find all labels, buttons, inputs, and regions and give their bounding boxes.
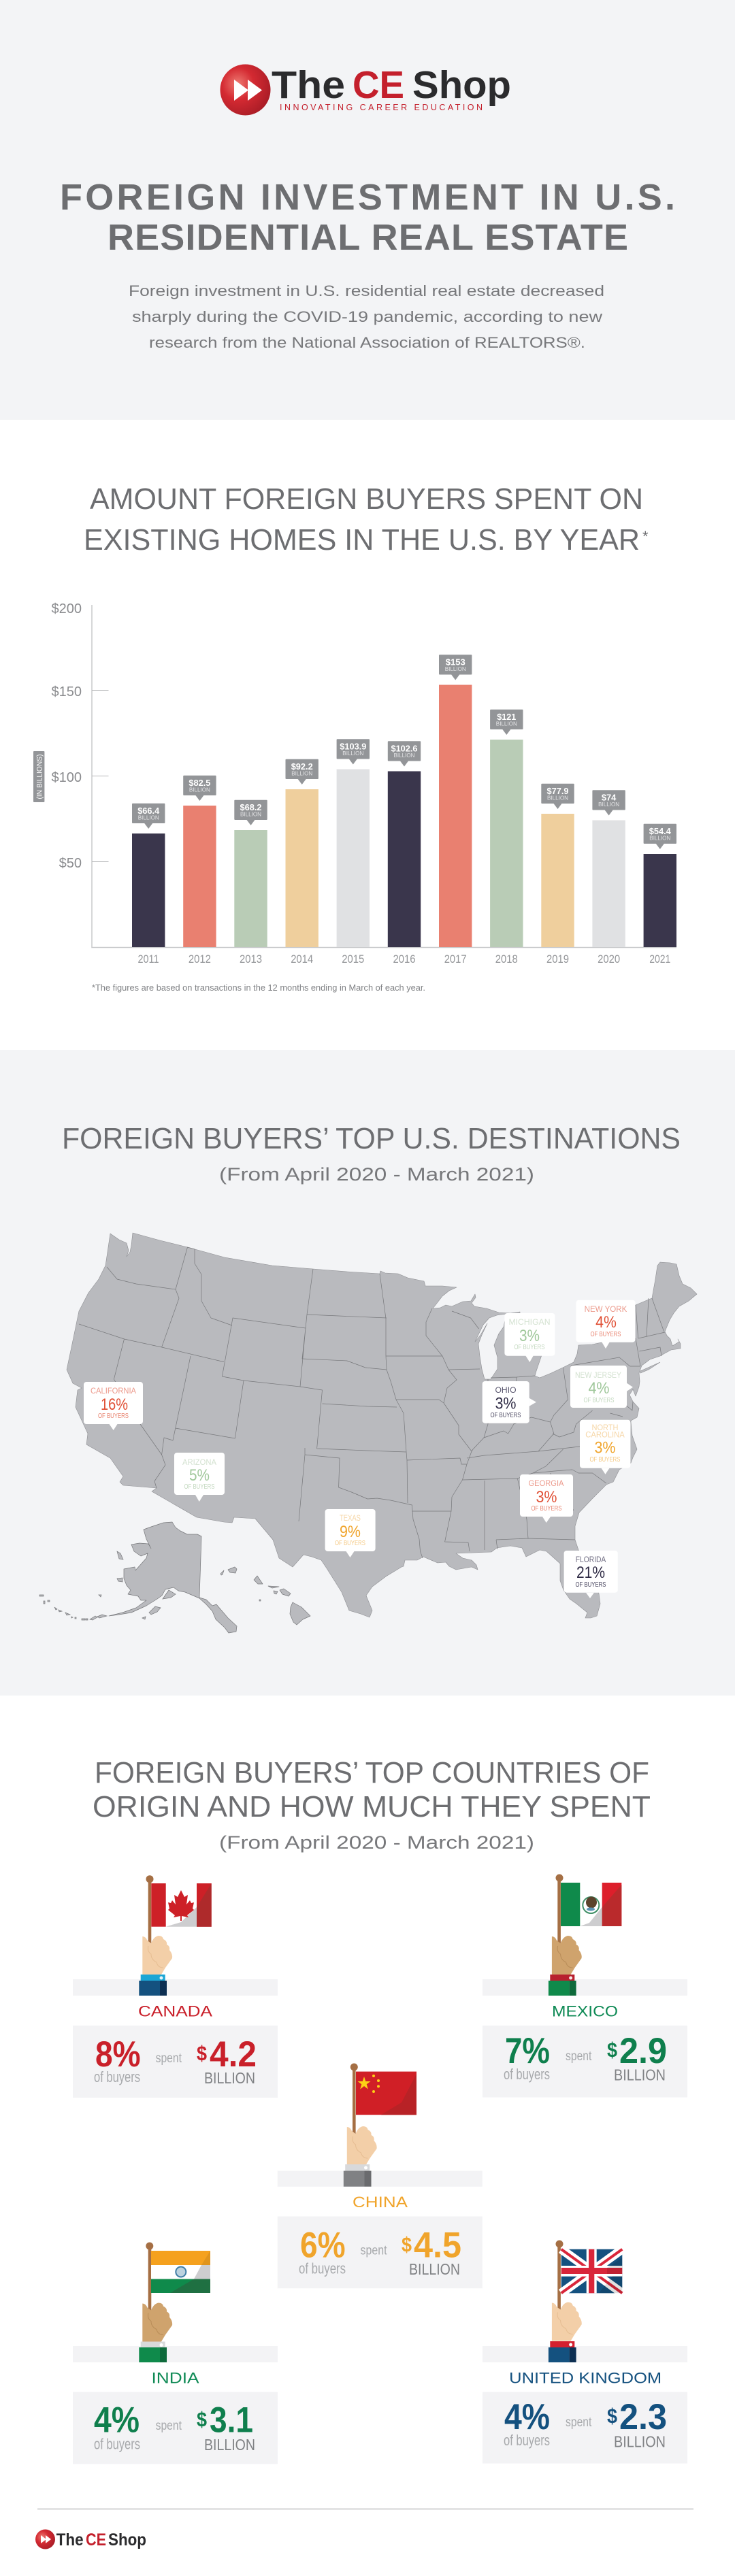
bar 2011: BILLION [138, 814, 159, 821]
intro text: Foreign investment in U.S. residential real estate decreased [129, 282, 604, 299]
bar 2021: 2021 [649, 953, 670, 965]
bar 2020: $74 [602, 793, 617, 803]
stats: United Kingdom: spent [566, 2415, 592, 2430]
callout: Georgia: 3% [536, 1488, 557, 1506]
heading: amount foreign buyers spent: AMOUNT FOREIGN BUYERS SPENT ON [90, 482, 643, 516]
callout: Michigan: OF BUYERS [514, 1343, 544, 1351]
bar 2018: BILLION [496, 720, 517, 727]
callout: New Jersey: 4% [588, 1379, 610, 1398]
bar 2019: 2019 [546, 953, 569, 965]
heading: top countries of origin [93, 1756, 651, 1853]
heading: amount foreign buyers spent: EXISTING HOMES IN THE U.S. BY YEAR [84, 523, 640, 557]
stats: Mexico [483, 2026, 687, 2097]
country: Canada [73, 1875, 278, 2098]
axis label: in billions: (IN BILLIONS) [35, 754, 44, 799]
callout: Ohio: 3% [495, 1395, 516, 1413]
callout: Texas: 9% [340, 1523, 361, 1541]
logo: footer: CE [86, 2530, 106, 2549]
bar 2020 [592, 790, 625, 965]
logo: The CE Shop: Shop [412, 63, 511, 107]
label: Canada: CANADA [138, 2003, 212, 2019]
label: India: INDIA [151, 2369, 199, 2386]
bar 2015: 2015 [342, 953, 364, 965]
bar 2017: BILLION [445, 665, 466, 672]
stats: Mexico: 2.9 [619, 2031, 667, 2071]
logo: The CE Shop: INNOVATING CAREER EDUCATION [280, 103, 483, 112]
stats: Mexico: of buyers [504, 2066, 550, 2083]
callout: Florida: 21% [576, 1564, 605, 1582]
bar 2013 [234, 800, 267, 965]
callout: New Jersey: NEW JERSEY [575, 1372, 621, 1380]
icon: hand holding UK flag [549, 2240, 622, 2362]
callout: New York: 4% [595, 1313, 617, 1332]
chart axes: $50 [59, 856, 82, 871]
callout: Georgia [520, 1474, 573, 1523]
bar 2021: $54.4 [649, 826, 672, 836]
chart axes: $150 [52, 684, 82, 699]
callout: Texas: TEXAS [340, 1515, 361, 1523]
stats: Mexico: $ [607, 2038, 617, 2062]
callout: California [84, 1382, 143, 1430]
axis label: in billions [33, 751, 44, 802]
icon: hand holding Chinese flag [344, 2063, 416, 2187]
callout: Florida [564, 1551, 618, 1598]
panel: top countries of origin [0, 1696, 735, 2576]
heading: top countries of origin: ORIGIN AND HOW MUCH THEY SPENT [93, 1790, 651, 1823]
label: United Kingdom: UNITED KINGDOM [509, 2369, 662, 2386]
chart axes: $100 [52, 770, 82, 785]
bar 2015: BILLION [342, 750, 363, 757]
bar 2014 [286, 759, 318, 965]
stats: Mexico: BILLION [614, 2066, 666, 2083]
Alaska [39, 1522, 237, 1633]
stats: China: spent [361, 2244, 387, 2258]
bar chart [33, 601, 676, 965]
callout: Arizona: 5% [189, 1466, 210, 1485]
stats: China [278, 2217, 483, 2288]
title [60, 177, 675, 258]
contiguous states [67, 1233, 697, 1618]
stats: United Kingdom: of buyers [504, 2432, 550, 2449]
callout: Ohio: OHIO [495, 1387, 517, 1395]
stats: Canada: of buyers [94, 2068, 140, 2085]
bar 2012: $82.5 [189, 778, 210, 788]
heading: amount foreign buyers spent [84, 482, 649, 557]
callout: Michigan: MICHIGAN [509, 1319, 550, 1327]
label: China: CHINA [353, 2194, 408, 2211]
stats: India: 3.1 [210, 2400, 253, 2441]
callout: Florida: FLORIDA [576, 1556, 606, 1564]
stats: Canada: 4.2 [210, 2034, 257, 2075]
bar 2013: BILLION [240, 810, 261, 817]
stats: India: of buyers [94, 2436, 140, 2453]
callout: Arizona [174, 1453, 225, 1502]
bar 2014: $92.2 [291, 761, 313, 772]
stats: China: $ [402, 2232, 412, 2256]
bar 2011 [132, 804, 165, 965]
bar 2014: 2014 [291, 953, 313, 965]
callout: California: CALIFORNIA [91, 1387, 136, 1396]
chart axes [52, 601, 676, 947]
callout: Texas: OF BUYERS [335, 1539, 365, 1547]
icon: hand holding Mexican flag [549, 1874, 621, 1996]
callout: New Jersey [570, 1366, 633, 1408]
stats: United Kingdom [483, 2392, 687, 2464]
heading: top U.S. destinations [62, 1122, 681, 1185]
bar 2019: $77.9 [547, 786, 569, 796]
title: RESIDENTIAL REAL ESTATE [108, 217, 628, 258]
country: China [278, 2063, 483, 2288]
bar 2011: 2011 [137, 953, 159, 965]
bar 2018: 2018 [495, 953, 518, 965]
country: India [73, 2243, 278, 2464]
bar 2012: 2012 [189, 953, 211, 965]
bar 2019: BILLION [547, 794, 568, 801]
callout: Michigan [504, 1313, 555, 1362]
callout: Ohio: OF BUYERS [490, 1411, 521, 1419]
logo: The CE Shop: The [272, 63, 345, 107]
country: Mexico [483, 1874, 687, 2097]
stats: India: spent [156, 2419, 182, 2433]
bar 2016 [388, 741, 421, 965]
heading: top U.S. destinations: (From April 2020 - March 2021) [219, 1164, 534, 1185]
stats: Mexico: 7% [505, 2031, 550, 2071]
bar 2019 [541, 784, 574, 965]
callout: North Carolina: 3% [595, 1438, 615, 1457]
logo: The CE Shop [220, 63, 511, 116]
stats: Canada: 8% [95, 2034, 141, 2075]
map of the United States [39, 1233, 697, 1633]
stats: India [73, 2392, 278, 2464]
callout: Michigan: 3% [519, 1327, 540, 1345]
callout: North Carolina: CAROLINA [585, 1432, 625, 1440]
callout: New York: OF BUYERS [591, 1330, 621, 1338]
stats: India: BILLION [204, 2436, 255, 2454]
heading: top countries of origin: FOREIGN BUYERS’ TOP COUNTRIES OF [95, 1756, 649, 1789]
bar 2011: $66.4 [137, 806, 160, 816]
bar 2015: $103.9 [340, 742, 366, 752]
stats: United Kingdom: 4% [504, 2397, 550, 2437]
bar 2012: BILLION [189, 786, 210, 793]
stats: China: 4.5 [414, 2225, 461, 2265]
bar 2018: $121 [497, 712, 516, 722]
callout: New York [576, 1300, 636, 1349]
bar 2014: BILLION [291, 770, 312, 776]
bar 2017: $153 [446, 657, 466, 667]
logo: footer: Shop [108, 2530, 146, 2549]
heading: top countries of origin: (From April 2020 - March 2021) [219, 1832, 534, 1853]
stats: India: $ [197, 2407, 207, 2431]
stats: Canada [73, 2026, 278, 2098]
stats: India: 4% [94, 2400, 140, 2441]
title: FOREIGN INVESTMENT IN U.S. [60, 177, 675, 218]
panel: spending by year [0, 420, 735, 1050]
callout: North Carolina [580, 1420, 630, 1474]
heading: top U.S. destinations: FOREIGN BUYERS’ TOP U.S. DESTINATIONS [62, 1122, 681, 1155]
callout: California: 16% [101, 1396, 128, 1414]
callout: Arizona: ARIZONA [182, 1459, 216, 1467]
bar 2012 [183, 776, 216, 965]
panel: top U.S. destinations [0, 1050, 735, 1696]
stats: Canada: $ [197, 2041, 207, 2065]
callout: Georgia: OF BUYERS [531, 1504, 562, 1513]
bar 2016: $102.6 [391, 744, 418, 754]
icon: hand holding Canadian flag [139, 1875, 212, 1996]
bar 2021 [644, 824, 676, 965]
Hawaii [220, 1567, 310, 1625]
footnote: *The figures are based on transactions in the 12 months ending in March of each year. [92, 983, 425, 993]
bar 2013: 2013 [240, 953, 262, 965]
stats: Canada: spent [156, 2051, 182, 2066]
country: United Kingdom [483, 2240, 687, 2464]
panel: header [0, 0, 735, 420]
callout: Georgia: GEORGIA [528, 1480, 564, 1488]
intro text: sharply during the COVID-19 pandemic, according to new [132, 308, 602, 325]
stats: China: of buyers [299, 2260, 346, 2277]
icon: hand holding Indian flag [139, 2243, 210, 2362]
footer [35, 2508, 693, 2549]
bar 2017: 2017 [444, 953, 467, 965]
callout: Arizona: OF BUYERS [184, 1483, 215, 1491]
logo: The CE Shop: CE [353, 63, 404, 107]
stats: United Kingdom: BILLION [614, 2433, 666, 2451]
label: Mexico: MEXICO [552, 2003, 618, 2019]
stats: United Kingdom: 2.3 [619, 2397, 667, 2437]
callout: California: OF BUYERS [98, 1412, 129, 1420]
bar 2020: 2020 [598, 953, 620, 965]
bar 2017 [439, 655, 472, 965]
stats: Canada: BILLION [204, 2069, 255, 2087]
bar 2020: BILLION [598, 801, 619, 808]
intro text: research from the National Association of REALTORS®. [149, 334, 585, 351]
chart axes: $200 [52, 601, 82, 616]
callout: Ohio [483, 1381, 536, 1423]
callout: New York: NEW YORK [585, 1306, 627, 1314]
callout: North Carolina: NORTH [592, 1424, 618, 1432]
bar 2018 [490, 710, 523, 965]
stats: Mexico: spent [566, 2049, 592, 2064]
bar 2021: BILLION [649, 834, 670, 841]
bar 2013: $68.2 [240, 802, 261, 812]
callout: North Carolina: OF BUYERS [589, 1455, 621, 1464]
stats: China: 6% [300, 2225, 346, 2265]
logo: footer: The [56, 2530, 84, 2549]
stats: China: BILLION [409, 2260, 460, 2278]
stats: United Kingdom: $ [607, 2404, 617, 2428]
bar 2015 [337, 739, 370, 965]
intro text [129, 282, 604, 351]
callout: Florida: OF BUYERS [576, 1581, 606, 1589]
bar 2016: BILLION [393, 752, 415, 759]
logo: footer [35, 2530, 146, 2549]
callout: Texas [325, 1509, 376, 1557]
bar 2016: 2016 [393, 953, 415, 965]
heading: amount foreign buyers spent: * [642, 528, 649, 545]
callout: New Jersey: OF BUYERS [584, 1396, 614, 1404]
